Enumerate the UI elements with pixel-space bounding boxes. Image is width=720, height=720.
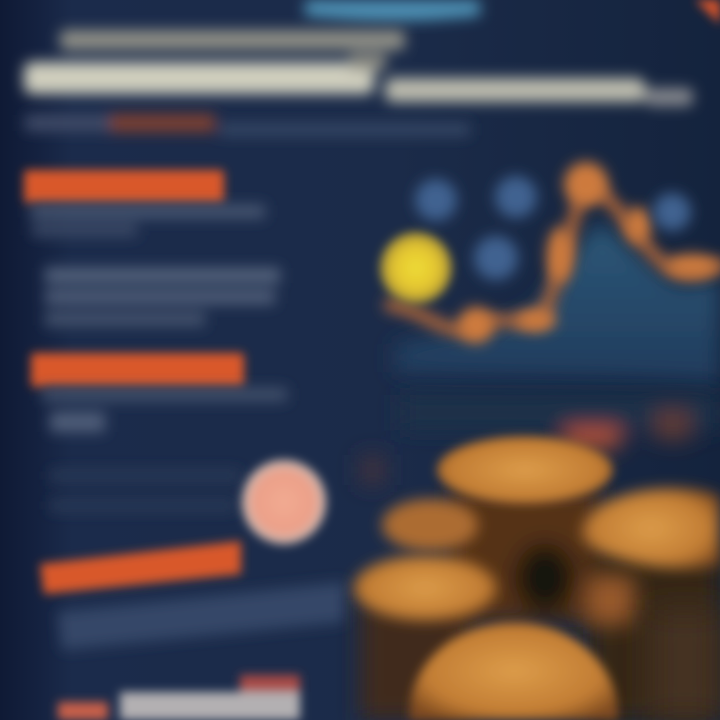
rear dark stack — [360, 490, 720, 720]
chart highlights — [458, 162, 718, 343]
lower chart strip — [360, 395, 720, 485]
coin: bottom foreground — [410, 622, 618, 720]
section 3 text block — [58, 582, 345, 650]
section 3 heading bar — [40, 541, 241, 594]
icon: pink circle — [242, 460, 326, 544]
chart line — [390, 185, 720, 330]
dots — [415, 176, 691, 280]
top badge — [305, 0, 480, 21]
right stack detail — [650, 610, 720, 720]
chart area — [395, 225, 720, 385]
title — [24, 30, 693, 106]
coin: left stack top — [353, 555, 497, 621]
subtitle — [25, 114, 470, 136]
section 2 heading bar — [31, 353, 244, 387]
coin: main top — [437, 436, 613, 504]
coin stacks — [353, 436, 720, 720]
section 2 text — [42, 388, 287, 511]
section 4 heading bar — [58, 675, 300, 720]
icon: yellow sun — [380, 232, 452, 304]
section 1 heading bar — [24, 170, 224, 203]
corner accent — [695, 0, 720, 24]
section 1 text — [30, 205, 280, 326]
coin: small left — [382, 499, 478, 551]
chart: area and line — [380, 162, 720, 385]
coin: right top — [582, 488, 720, 569]
left panel column — [24, 170, 345, 720]
coin edge right — [585, 575, 635, 625]
